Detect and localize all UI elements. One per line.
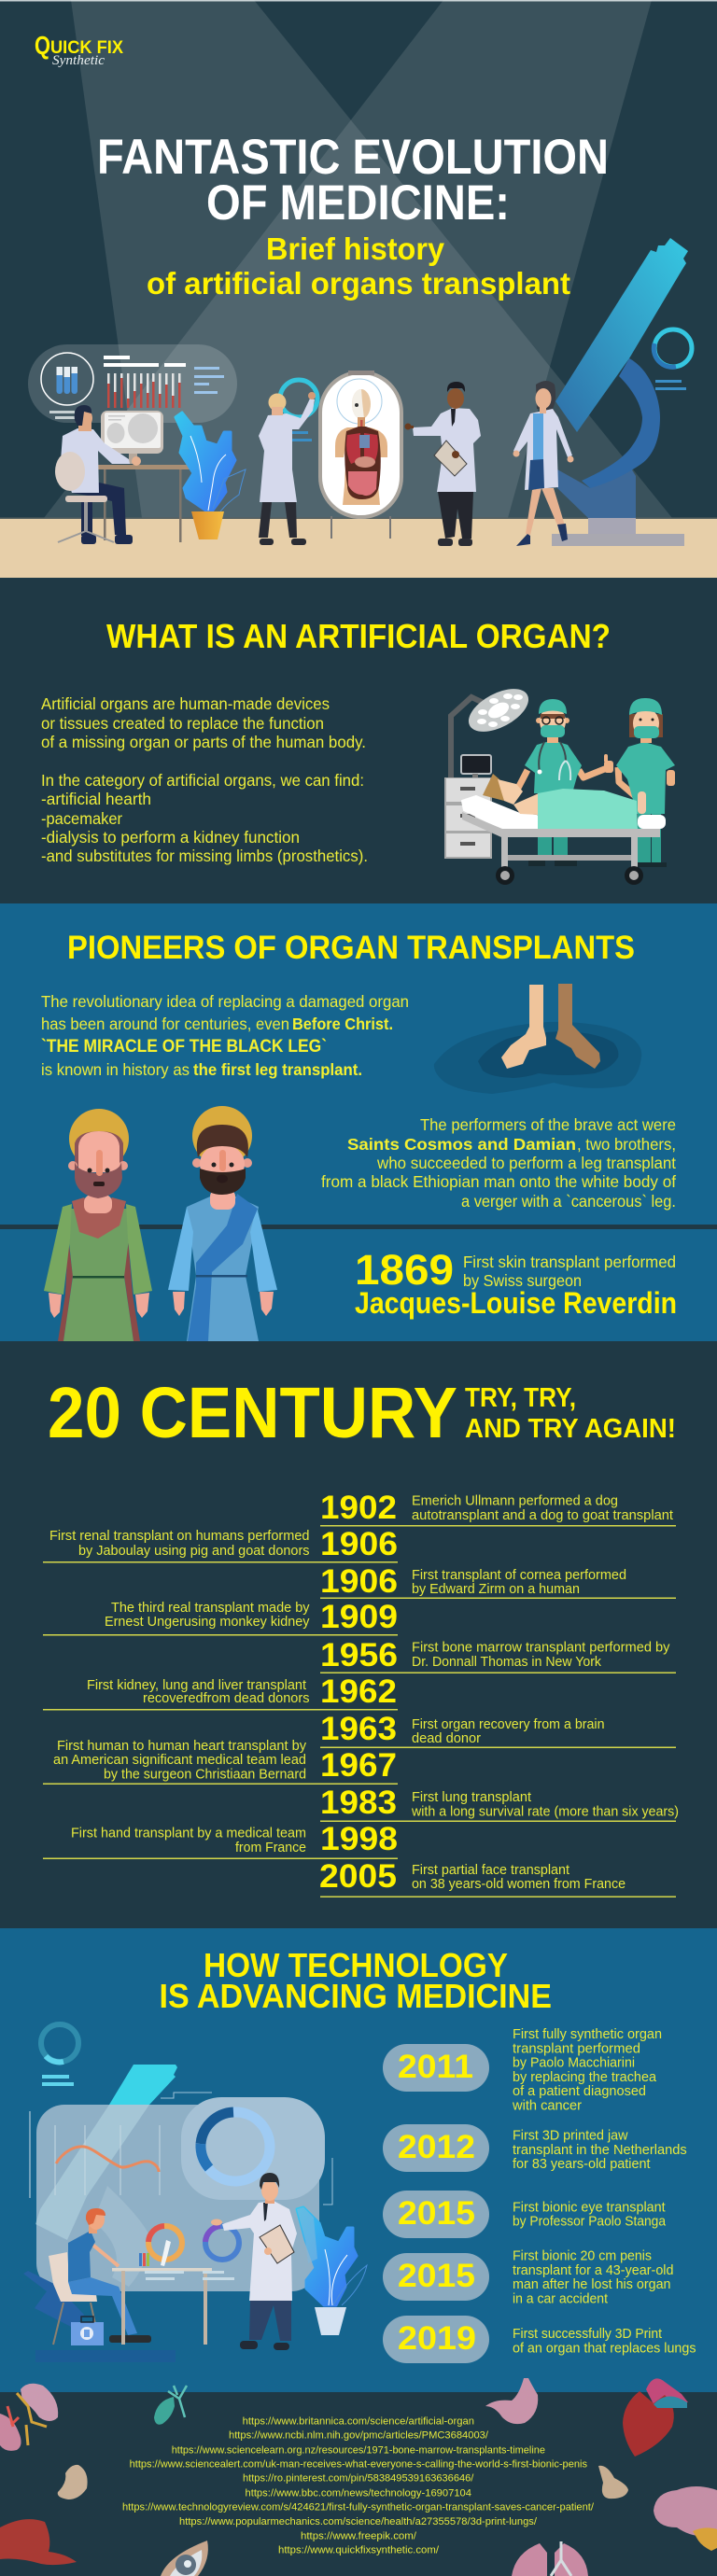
text block: performers: a verger with a `cancerous` leg. — [461, 1192, 676, 1211]
text block: performers: The performers of the brave act were — [420, 1115, 676, 1134]
text block: definition: -pacemaker — [41, 809, 122, 828]
figure: Saint Cosmos — [44, 1109, 152, 1341]
technology milestones: with cancer — [512, 2098, 582, 2114]
technology milestones: First bionic 20 cm penis — [513, 2248, 652, 2264]
timeline right events: with a long survival rate (more than six years) — [411, 1803, 679, 1820]
line chart — [56, 2147, 159, 2172]
illustration: transplanted feet — [434, 984, 641, 1094]
title — [97, 130, 609, 231]
subtitle: Brief history — [266, 231, 445, 266]
spotlight beams — [44, 0, 672, 518]
heading: TRY, TRY, — [465, 1383, 576, 1413]
lab table — [112, 2240, 234, 2345]
timeline left events: Ernest Ungerusing monkey kidney — [105, 1614, 310, 1630]
source list: https://www.britannica.com/science/artificial-organ — [243, 2415, 474, 2427]
timeline right events: on 38 years-old women from France — [412, 1876, 626, 1892]
text block: the miracle — [41, 992, 409, 1079]
year pills: 2015 — [398, 2195, 475, 2232]
timeline years: 1956 — [320, 1637, 398, 1673]
source list: https://www.quickfixsynthetic.com/ — [278, 2545, 440, 2556]
heading: PIONEERS OF ORGAN TRANSPLANTS — [67, 930, 635, 966]
text block: definition: of a missing organ or parts of the human body. — [41, 733, 366, 751]
source list: https://www.sciencelearn.org.nz/resources/1971-bone-marrow-transplants-timeline — [172, 2444, 545, 2456]
text block: performers: Saints Cosmos and Damian — [347, 1135, 576, 1154]
panel: how technology is advancing medicine — [0, 1928, 717, 2392]
text block: performers — [321, 1115, 676, 1211]
technology milestones: transplant performed — [513, 2040, 640, 2056]
callout: 1869: First skin transplant performed — [463, 1253, 676, 1271]
icon: heart — [623, 2378, 688, 2457]
timeline years: 1967 — [320, 1747, 397, 1784]
ring charts — [148, 2226, 239, 2260]
timeline right events: autotransplant and a dog to goat transplant — [412, 1507, 674, 1523]
callout: 1869: 1869 — [355, 1246, 454, 1294]
microscope silhouette — [109, 2065, 177, 2105]
icon: ring top right — [654, 329, 692, 390]
figure: seated patient — [23, 2208, 176, 2362]
timeline left events: First human to human heart transplant by — [57, 1738, 306, 1754]
year pills: 2012 — [398, 2129, 475, 2165]
timeline years: 1962 — [320, 1673, 397, 1710]
floor — [0, 519, 717, 578]
heading: IS ADVANCING MEDICINE — [159, 1977, 552, 2015]
illustration: digital lab — [23, 2024, 367, 2362]
timeline years: 1902 — [320, 1490, 397, 1526]
figure: doctor — [211, 2173, 297, 2350]
left surgeon — [515, 699, 613, 866]
title: FANTASTIC EVOLUTION — [97, 130, 609, 185]
logo: UICK FIX — [50, 38, 123, 58]
icon: eye — [161, 2541, 208, 2576]
technology milestones: First fully synthetic organ — [513, 2026, 662, 2042]
subtitle — [147, 231, 570, 301]
illustration: operating room — [444, 680, 675, 885]
timeline right events: First bone marrow transplant performed by — [412, 1639, 670, 1656]
title: OF MEDICINE: — [206, 175, 510, 231]
source list: https://www.sciencealert.com/uk-man-receives-what-everyone-s-calling-the-world-s-first-bionic-penis — [130, 2458, 587, 2470]
heading: AND TRY AGAIN! — [465, 1414, 676, 1444]
text block: the miracle: `THE MIRACLE OF THE BLACK LEG` — [41, 1037, 327, 1057]
timeline left events: First kidney, lung and liver transplant — [87, 1677, 307, 1693]
technology milestones: First bionic eye transplant — [513, 2199, 666, 2215]
timeline left events: First hand transplant by a medical team — [71, 1826, 306, 1841]
timeline years: 1906 — [320, 1526, 398, 1562]
icon: ear — [58, 2465, 88, 2499]
panel: pioneers of organ transplants — [0, 903, 717, 1341]
year pills — [383, 2044, 489, 2363]
text block: the miracle: has been around for centuries, even — [41, 1015, 289, 1033]
text block: performers: from a black Ethiopian man onto the white body of — [321, 1172, 676, 1191]
text block: definition: -artificial hearth — [41, 790, 151, 808]
timeline years: 2005 — [319, 1858, 397, 1895]
text block: the miracle: Before Christ. — [292, 1015, 393, 1033]
figure: doctor at ring — [259, 380, 317, 545]
icon: brain — [654, 2486, 717, 2551]
icon: blue plant — [176, 413, 246, 539]
timeline right events: Dr. Donnall Thomas in New York — [412, 1654, 601, 1670]
panel: footer sources — [0, 2378, 717, 2576]
timeline years: 1909 — [320, 1599, 398, 1635]
source list: https://www.popularmechanics.com/science/health/a27355578/3d-print-lungs/ — [179, 2516, 538, 2527]
source list: https://www.technologyreview.com/s/424621/first-fully-synthetic-organ-transplant-saves-cancer-patient/ — [122, 2502, 595, 2513]
technology milestones: transplant in the Netherlands — [513, 2142, 687, 2158]
technology milestones: by Professor Paolo Stanga — [513, 2214, 667, 2230]
timeline right events: First organ recovery from a brain — [412, 1716, 605, 1732]
text block: definition: Artificial organs are human-made devices — [41, 694, 330, 713]
source list — [122, 2415, 595, 2556]
icon: ring and bars — [41, 2024, 78, 2086]
icon: nose — [598, 2466, 628, 2499]
icon: plant in pot — [297, 2207, 367, 2335]
heading: HOW TECHNOLOGY — [204, 1946, 508, 1984]
text block: definition: -dialysis to perform a kidney function — [41, 828, 300, 847]
timeline years: 1983 — [320, 1785, 397, 1821]
timeline left events: from France — [235, 1840, 306, 1855]
timeline left events — [49, 1528, 310, 1855]
logo: Synthetic — [52, 53, 105, 68]
timeline right events: Emerich Ullmann performed a dog — [412, 1493, 618, 1508]
logo: Q — [35, 31, 50, 60]
subtitle: of artificial organs transplant — [147, 266, 570, 301]
source list: https://www.freepik.com/ — [301, 2530, 417, 2541]
screen panels — [36, 2105, 319, 2291]
timeline left events: First renal transplant on humans performed — [49, 1528, 310, 1544]
donut chart — [201, 2112, 270, 2181]
patient on bed — [462, 774, 666, 829]
timeline left events: by the surgeon Christiaan Bernard — [104, 1766, 306, 1783]
text block: the miracle: The revolutionary idea of replacing a damaged organ — [41, 992, 409, 1011]
text block: the miracle: the first leg transplant. — [193, 1060, 362, 1079]
figure: seated scientist — [55, 405, 194, 544]
timeline left events: an American significant medical team lead — [53, 1752, 306, 1768]
timeline right events: dead donor — [412, 1730, 481, 1746]
timeline left events: The third real transplant made by — [111, 1600, 310, 1616]
source list: https://www.ncbi.nlm.nih.gov/pmc/articles/PMC3684003/ — [229, 2430, 489, 2442]
technology milestones: by replacing the trachea — [513, 2069, 657, 2085]
technology milestones: of an organ that replaces lungs — [513, 2340, 696, 2356]
icon: kidneys — [0, 2384, 58, 2451]
text block: definition — [41, 694, 368, 865]
icon: liver — [0, 2519, 77, 2565]
timeline right events — [411, 1493, 679, 1892]
data panel — [28, 344, 237, 423]
technology milestones: transplant for a 43-year-old — [513, 2262, 674, 2278]
timeline right events: First lung transplant — [412, 1789, 532, 1805]
figure: doctor with clipboard — [405, 382, 481, 546]
bed frame — [462, 812, 660, 885]
figure: Saint Damian — [168, 1106, 277, 1341]
text block: definition: -and substitutes for missing limbs (prosthetics). — [41, 847, 368, 865]
icon: gallbladder — [154, 2386, 187, 2425]
callout: 1869: Jacques-Louise Reverdin — [355, 1286, 677, 1320]
figure: female doctor — [513, 381, 573, 546]
heading: 20 CENTURY — [48, 1373, 457, 1453]
panel: what is an artificial organ — [41, 617, 675, 885]
right surgeon — [616, 698, 675, 867]
technology milestones: First 3D printed jaw — [513, 2128, 628, 2144]
panel: 20 century timeline — [43, 1373, 679, 1897]
timeline right events: by Edward Zirm on a human — [412, 1581, 580, 1597]
year pills: 2019 — [398, 2320, 476, 2357]
timeline rules — [43, 1525, 676, 1897]
callout: 1869 — [355, 1246, 677, 1320]
icon: stomach — [485, 2378, 538, 2424]
text block: performers: , two brothers, — [577, 1135, 676, 1154]
callout: 1869: by Swiss surgeon — [463, 1271, 582, 1290]
figure: anatomical capsule — [320, 371, 401, 539]
text block: definition: or tissues created to replace the function — [41, 714, 324, 733]
logo — [35, 31, 123, 68]
timeline right events: First transplant of cornea performed — [412, 1567, 626, 1583]
year pills: 2011 — [398, 2049, 473, 2085]
technology milestones: of a patient diagnosed — [513, 2083, 646, 2099]
source list: https://www.bbc.com/news/technology-16907104 — [245, 2487, 471, 2499]
technology milestones: in a car accident — [513, 2291, 609, 2307]
timeline years: 1998 — [320, 1821, 398, 1857]
technology milestones: man after he lost his organ — [513, 2276, 670, 2292]
heading — [159, 1946, 552, 2015]
text block: performers: who succeeded to perform a leg transplant — [376, 1154, 676, 1172]
technology milestones: First successfully 3D Print — [513, 2326, 663, 2342]
source list: https://ro.pinterest.com/pin/583849539163636646/ — [243, 2473, 474, 2485]
technology milestones: by Paolo Macchiarini — [513, 2055, 635, 2071]
icon: microscope — [552, 238, 688, 546]
heading: WHAT IS AN ARTIFICIAL ORGAN? — [106, 617, 611, 655]
timeline left events: recoveredfrom dead donors — [143, 1690, 310, 1706]
timeline years — [319, 1490, 398, 1895]
timeline years: 1906 — [320, 1563, 398, 1600]
timeline left events: by Jaboulay using pig and goat donors — [78, 1543, 310, 1559]
year pills: 2015 — [398, 2258, 475, 2294]
panel: hero — [0, 0, 717, 579]
text block: definition: In the category of artificial organs, we can find: — [41, 771, 364, 790]
text block: the miracle: is known in history as — [41, 1060, 190, 1079]
technology milestones — [512, 2026, 696, 2356]
icon: lungs — [512, 2541, 588, 2576]
timeline right events: First partial face transplant — [412, 1862, 570, 1878]
technology milestones: for 83 years-old patient — [513, 2156, 651, 2172]
timeline years: 1963 — [320, 1711, 397, 1747]
